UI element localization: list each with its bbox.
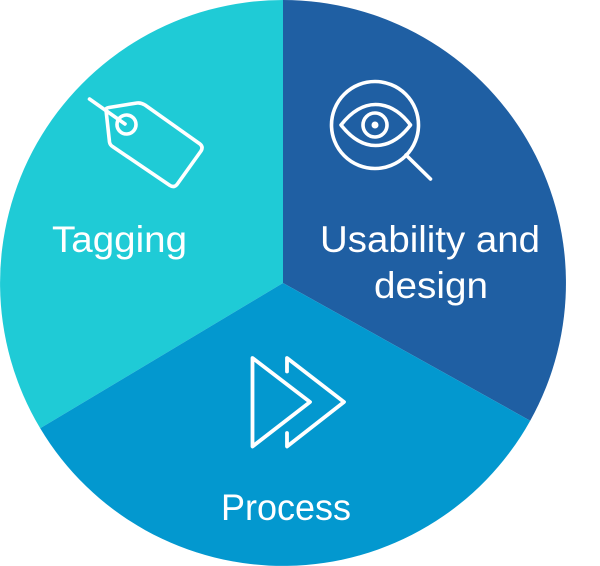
label: Usability and design	[320, 219, 540, 306]
icon: eye in magnifying glass	[332, 82, 430, 179]
segment: Process	[40, 283, 530, 566]
icon: price tag	[90, 99, 202, 187]
label: Process: Process	[221, 487, 351, 528]
label: Usability and design: design	[374, 265, 488, 306]
icon: fast forward arrows	[252, 358, 344, 446]
label: Usability and design: Usability and	[320, 219, 540, 260]
segment: Usability and design	[283, 0, 566, 421]
label: Tagging: Tagging	[52, 219, 187, 260]
segment: Tagging	[0, 0, 283, 428]
